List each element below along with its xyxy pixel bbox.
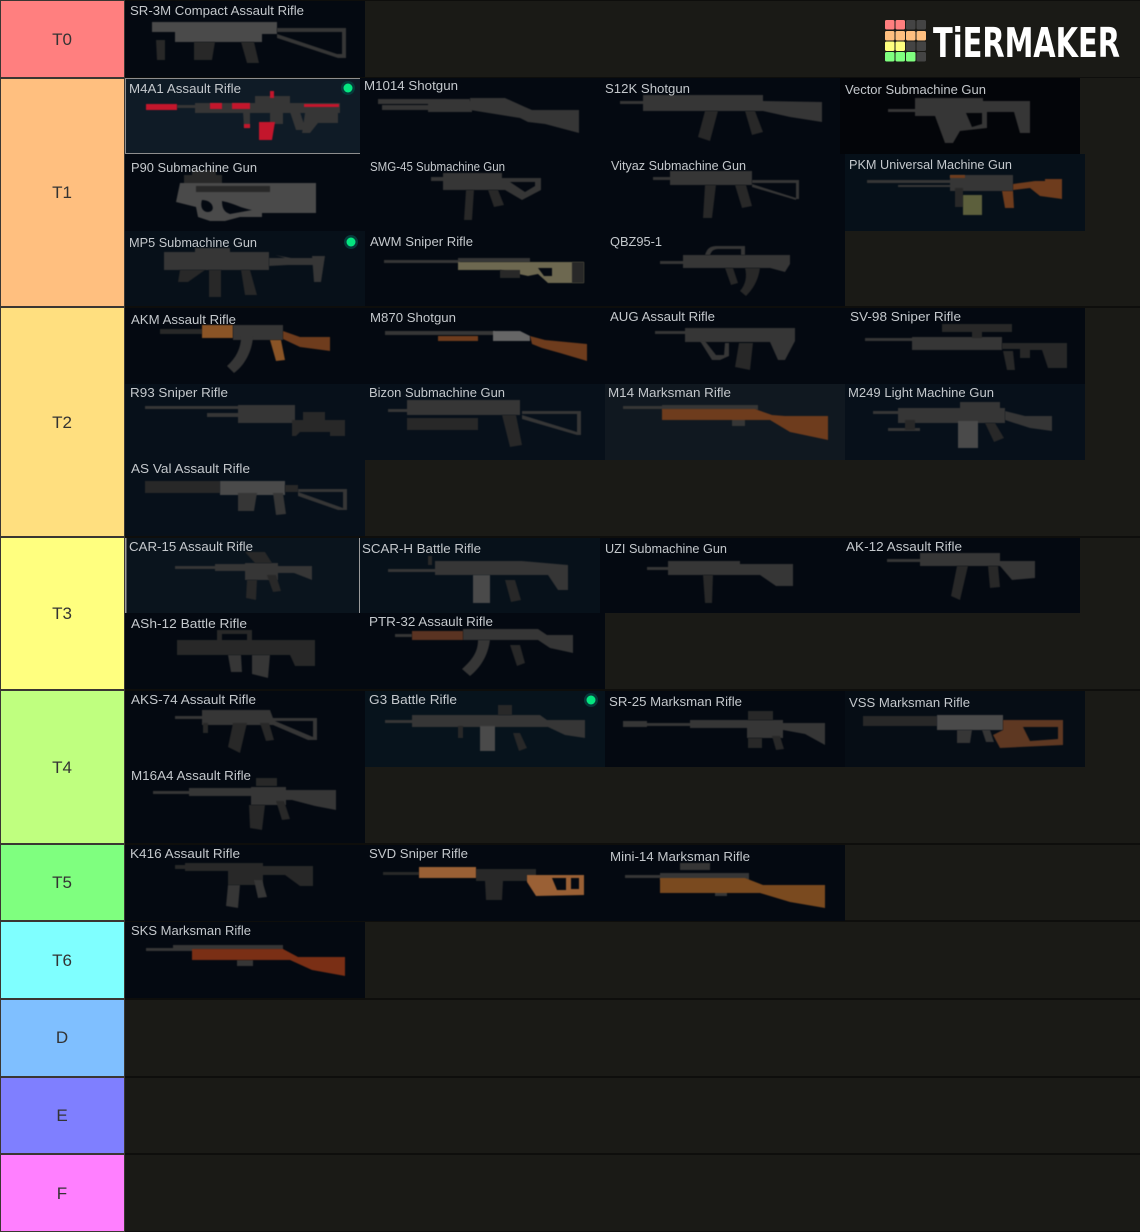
tier label T5	[1, 845, 124, 920]
name: AK-12 Assault Rifle	[846, 540, 962, 554]
gun	[175, 863, 313, 908]
card: SR-25	[605, 691, 845, 767]
card: AKS-74	[125, 691, 365, 767]
name: AS Val Assault Rifle	[131, 462, 250, 476]
card: MP5	[125, 231, 365, 306]
gun	[385, 705, 585, 751]
card: VSS	[845, 691, 1085, 767]
gun	[653, 171, 799, 218]
gun	[620, 95, 822, 141]
card: M1014	[360, 78, 600, 154]
name: SMG-45 Submachine Gun	[370, 160, 505, 174]
gun	[647, 561, 793, 603]
name: P90 Submachine Gun	[131, 161, 257, 175]
gun	[175, 710, 317, 753]
tier label T2	[1, 308, 124, 536]
card: M14	[605, 384, 845, 460]
gun	[867, 175, 1062, 215]
card: S12K	[600, 78, 840, 154]
tier label T1: T1	[52, 183, 72, 202]
gun	[384, 258, 584, 283]
tier label D	[1, 1000, 124, 1076]
name: SV-98 Sniper Rifle	[850, 310, 961, 324]
name: SKS Marksman Rifle	[131, 924, 251, 938]
gun	[625, 863, 825, 908]
name: M4A1 Assault Rifle	[129, 82, 241, 96]
gun	[660, 246, 790, 296]
tier label F: F	[57, 1184, 67, 1203]
name: Vector Submachine Gun	[845, 83, 986, 97]
status dot	[584, 693, 598, 707]
gun	[623, 711, 825, 750]
gun	[146, 945, 345, 976]
card: AWM	[365, 231, 605, 306]
tier label E: E	[56, 1106, 68, 1125]
name: VSS Marksman Rifle	[849, 696, 970, 710]
tier label T1	[1, 79, 124, 306]
name: S12K Shotgun	[605, 82, 690, 96]
card: PKM	[845, 154, 1085, 231]
tier label F	[1, 1155, 124, 1231]
card: M16A4	[125, 767, 365, 843]
tier label T3	[1, 538, 124, 689]
status dot	[341, 81, 355, 95]
name: K416 Assault Rifle	[130, 847, 240, 861]
name: M870 Shotgun	[370, 311, 456, 325]
card: Vector	[840, 78, 1080, 154]
gun	[145, 405, 345, 436]
gun	[175, 552, 312, 600]
tier label T0	[1, 1, 124, 77]
tier label D: D	[56, 1028, 68, 1047]
card: M870	[365, 308, 605, 384]
name: Mini-14 Marksman Rifle	[610, 850, 750, 864]
card: SR-3M	[125, 1, 365, 77]
name: ASh-12 Battle Rifle	[131, 617, 247, 631]
gun	[887, 553, 1035, 600]
card: K416	[125, 845, 365, 921]
card: AK-12	[840, 538, 1080, 613]
card: SMG-45	[365, 154, 605, 231]
name: UZI Submachine Gun	[605, 542, 727, 556]
gun	[145, 481, 347, 515]
name: PKM Universal Machine Gun	[849, 158, 1012, 172]
tier label T0: T0	[52, 30, 72, 49]
card: Bizon	[365, 384, 605, 460]
name: SVD Sniper Rifle	[369, 847, 468, 861]
card: PTR-32	[365, 613, 605, 689]
card: P90	[125, 154, 365, 231]
name: Bizon Submachine Gun	[369, 386, 505, 400]
gun	[177, 630, 315, 678]
card: SKS	[125, 922, 365, 998]
name: AUG Assault Rifle	[610, 310, 715, 324]
gun	[863, 715, 1063, 748]
name: R93 Sniper Rifle	[130, 386, 228, 400]
card: QBZ95-1	[605, 231, 845, 306]
gun	[160, 325, 330, 373]
card: R93	[125, 384, 365, 460]
name: SR-3M Compact Assault Rifle	[130, 4, 304, 18]
gun	[873, 402, 1052, 448]
gun	[383, 867, 584, 900]
tier label E	[1, 1078, 124, 1153]
card: SV-98	[845, 308, 1085, 384]
name: MP5 Submachine Gun	[129, 236, 257, 250]
name: M16A4 Assault Rifle	[131, 769, 251, 783]
card: SCAR-H	[360, 538, 600, 613]
tier label T3: T3	[52, 604, 72, 623]
gun	[385, 331, 587, 361]
gun	[623, 405, 828, 440]
card: M249	[845, 384, 1085, 460]
card: M4A1 (highlighted)	[126, 78, 360, 154]
gun	[388, 400, 581, 447]
name: AKM Assault Rifle	[131, 313, 236, 327]
gun	[176, 170, 316, 221]
name: AWM Sniper Rifle	[370, 235, 473, 249]
gun	[431, 173, 541, 220]
name: QBZ95-1	[610, 235, 662, 249]
gun	[153, 778, 336, 830]
tier label T6: T6	[52, 951, 72, 970]
card: ASh-12	[125, 613, 365, 689]
tier label T5: T5	[52, 873, 72, 892]
card: UZI	[600, 538, 840, 613]
gun	[388, 556, 568, 603]
name: PTR-32 Assault Rifle	[369, 615, 493, 629]
card: CAR-15	[125, 538, 360, 613]
tier label T2: T2	[52, 413, 72, 432]
name: M1014 Shotgun	[364, 79, 458, 93]
gun	[152, 22, 346, 63]
card: Mini-14	[605, 845, 845, 921]
gun	[865, 324, 1067, 370]
gun	[378, 98, 579, 133]
name: M14 Marksman Rifle	[608, 386, 731, 400]
name: SR-25 Marksman Rifle	[609, 695, 742, 709]
name: Vityaz Submachine Gun	[611, 159, 746, 173]
name: AKS-74 Assault Rifle	[131, 693, 256, 707]
card: AKM	[125, 308, 365, 384]
status dot	[344, 235, 358, 249]
gun	[164, 248, 325, 297]
gun	[395, 629, 573, 676]
card: Vityaz	[605, 154, 845, 231]
tier label T6	[1, 922, 124, 998]
name: G3 Battle Rifle	[369, 693, 457, 707]
tier label T4: T4	[52, 758, 72, 777]
card: SVD	[365, 845, 605, 921]
card: G3	[365, 691, 605, 767]
tier label T4	[1, 691, 124, 843]
name: CAR-15 Assault Rifle	[129, 540, 253, 554]
gun	[655, 328, 795, 370]
gun	[888, 98, 1030, 143]
card: AUG	[605, 308, 845, 384]
card: AS Val	[125, 460, 365, 536]
gun	[146, 91, 340, 140]
name: M249 Light Machine Gun	[848, 386, 994, 400]
name: SCAR-H Battle Rifle	[362, 542, 481, 556]
